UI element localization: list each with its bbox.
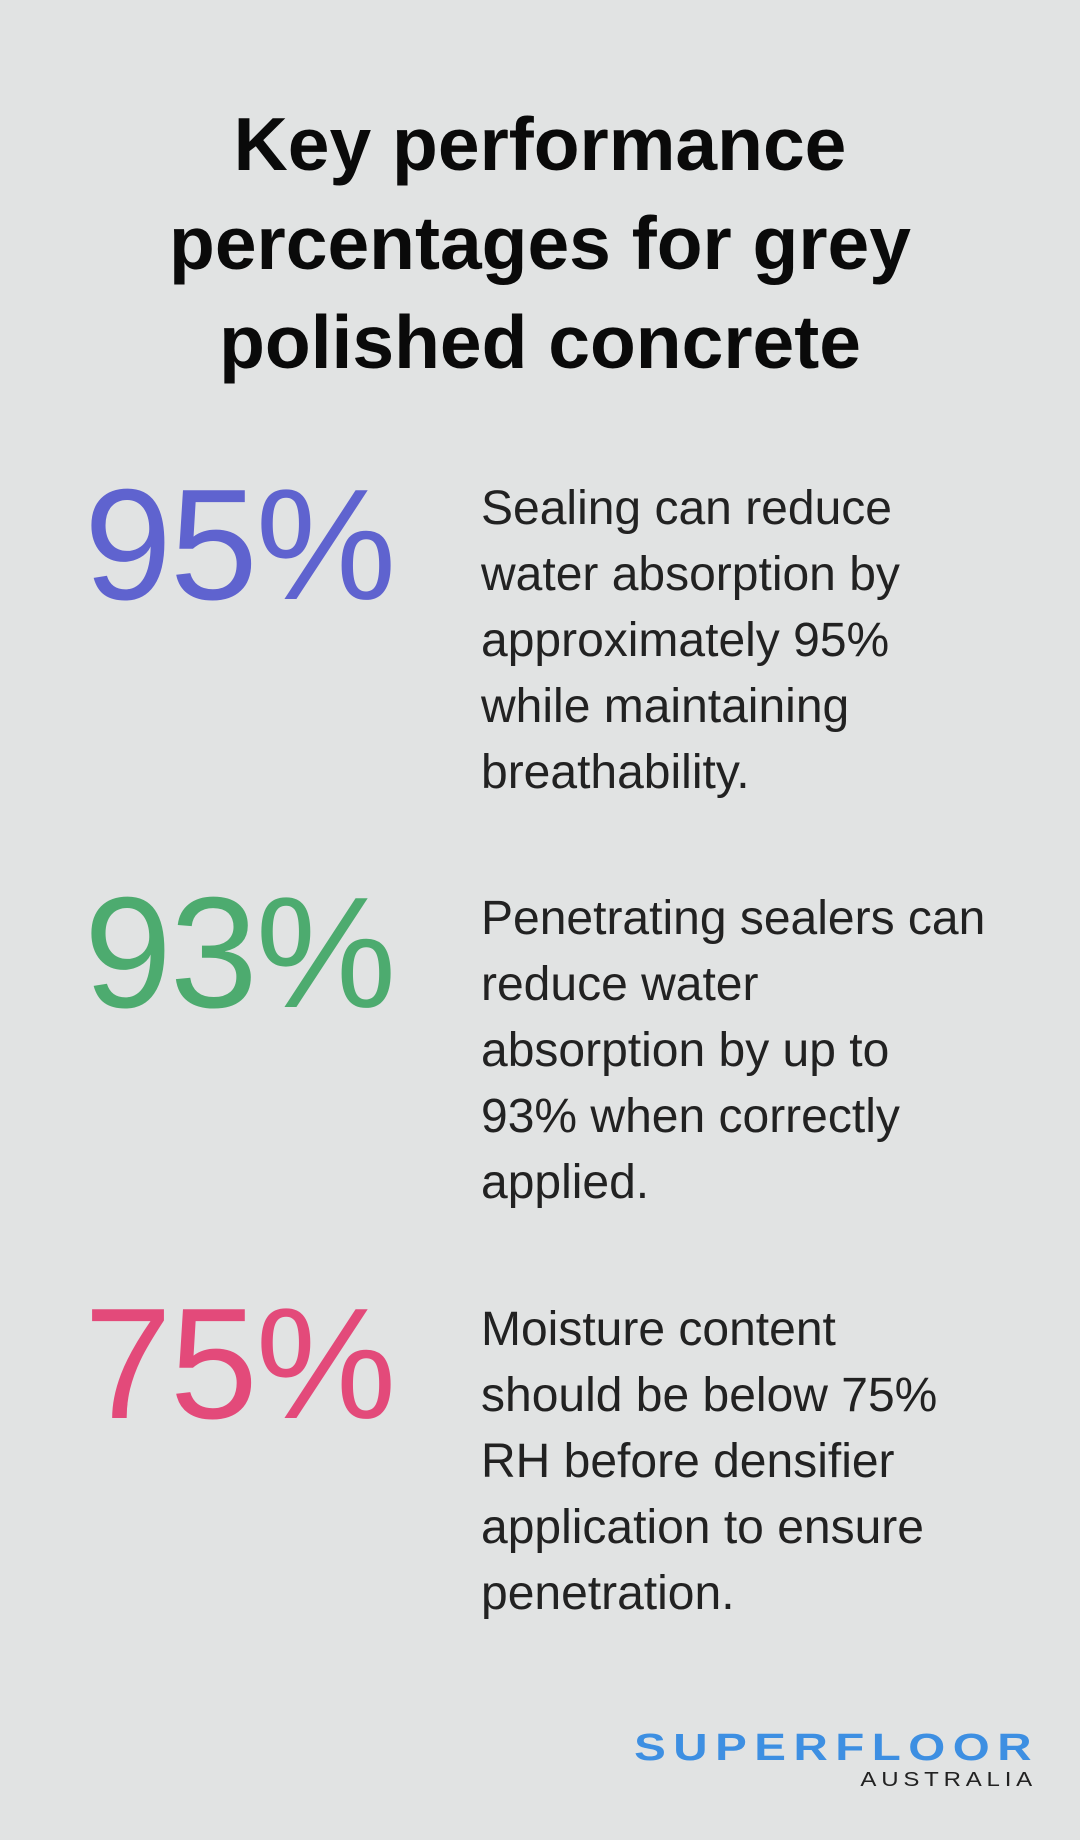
stat 3 text [481,1303,937,1620]
stat 1 text: approximately 95% [481,614,889,667]
stat 1 number: 95% [84,457,394,633]
logo [634,1727,1039,1791]
stat 3 text: RH before densifier [481,1435,895,1488]
title [169,102,911,384]
stat 2 text: reduce water [481,958,758,1011]
stat 1 text: water absorption by [481,548,900,601]
stat 2 text: applied. [481,1156,649,1209]
title: polished concrete [219,300,861,384]
logo: AUSTRALIA [860,1769,1037,1791]
stat 2 text: absorption by up to [481,1024,889,1077]
stat 1 text [481,482,900,799]
title: percentages for grey [169,201,911,285]
stat 2 text: Penetrating sealers can [481,892,985,945]
stat 2 text: 93% when correctly [481,1090,900,1143]
stat 3 text: penetration. [481,1567,735,1620]
stat 3 text: application to ensure [481,1501,924,1554]
stat 3 text: should be below 75% [481,1369,937,1422]
stat 2 text [481,892,985,1209]
stat 1 text: Sealing can reduce [481,482,892,535]
stat 2 number: 93% [84,865,394,1041]
stat 3 number: 75% [84,1276,394,1452]
stat 3 text: Moisture content [481,1303,836,1356]
logo: SUPERFLOOR [634,1727,1039,1769]
stat 1 text: breathability. [481,746,750,799]
stat 1 text: while maintaining [481,680,849,733]
title: Key performance [234,102,846,186]
